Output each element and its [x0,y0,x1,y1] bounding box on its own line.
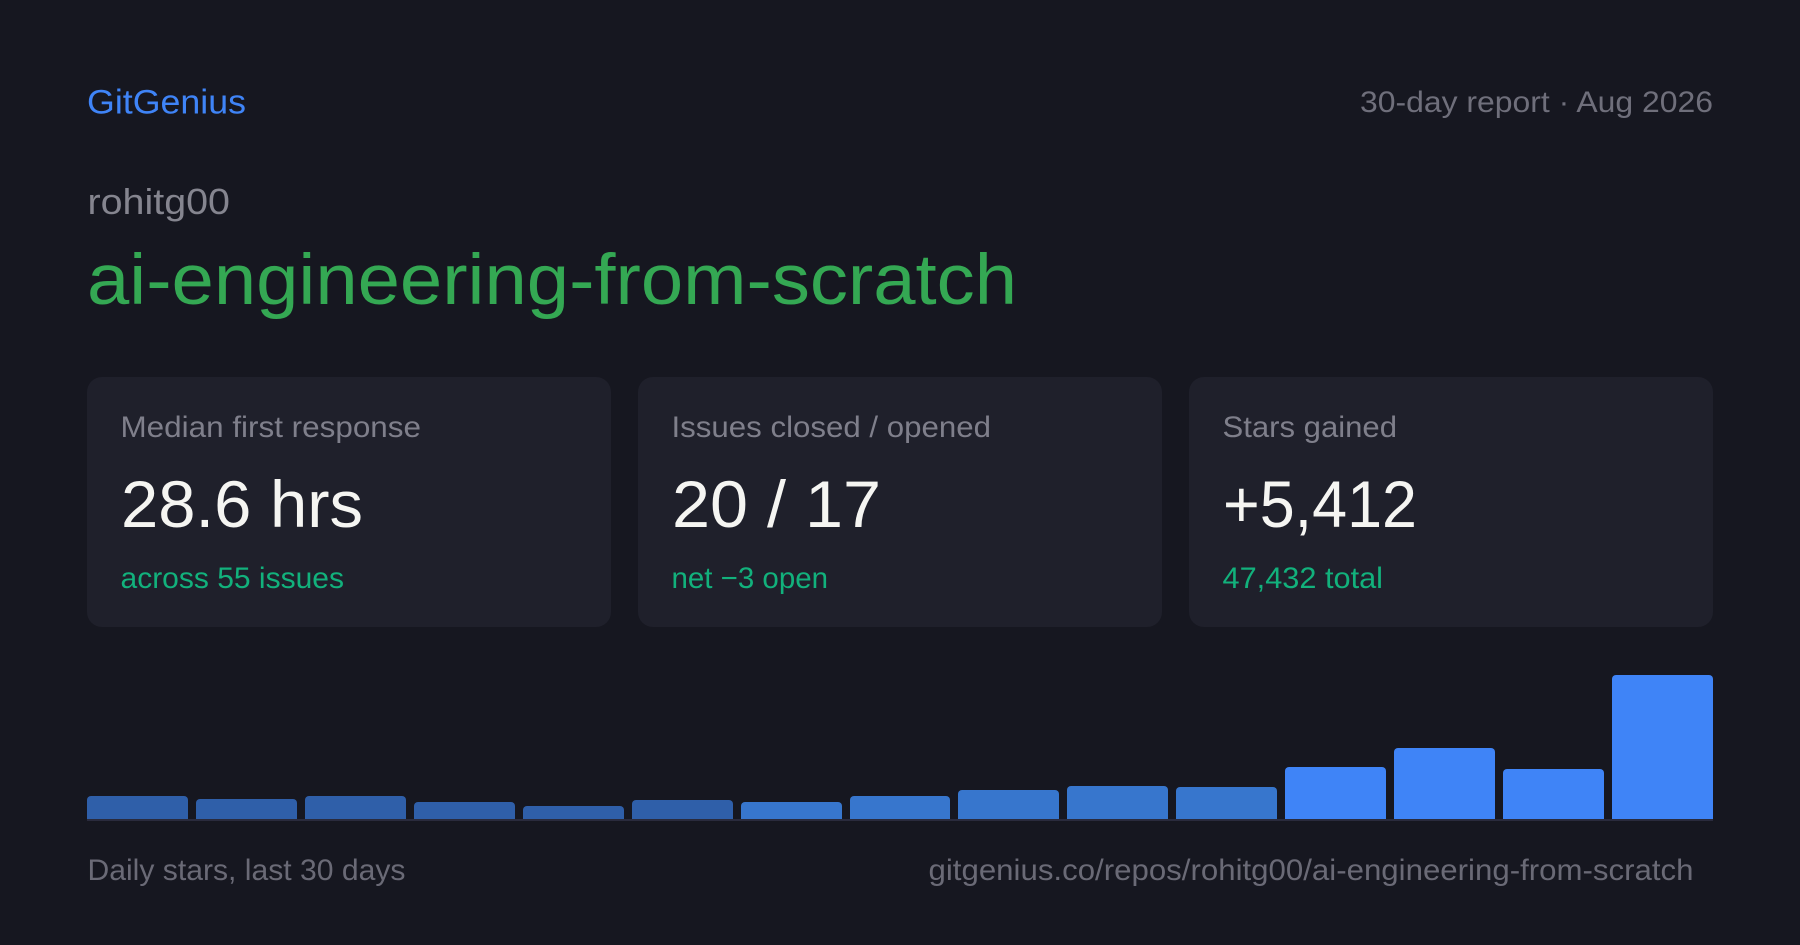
repo owner: rohitg00 [88,181,230,222]
sub-value: net −3 open [672,562,828,595]
value: +5,412 [1223,467,1417,541]
value: 28.6 hrs [121,467,363,541]
panel: issues closed / opened [638,377,1162,627]
chart caption: Daily stars, last 30 days [88,854,406,887]
source url: gitgenius.co/repos/rohitg00/ai-engineering-from-scratch [928,854,1694,887]
repo name: ai-engineering-from-scratch [87,241,1017,320]
report period: 30-day report · Aug 2026 [1360,86,1713,119]
label: Median first response [120,411,421,444]
label: Stars gained [1222,411,1397,444]
bar chart: daily stars [87,675,1713,821]
sub-value: 47,432 total [1222,562,1383,595]
panel: stars gained [1189,377,1713,627]
value: 20 / 17 [672,467,881,541]
label: Issues closed / opened [672,411,991,444]
panel: median first response [87,377,611,627]
brand name: GitGenius [87,84,246,122]
sub-value: across 55 issues [120,562,344,595]
